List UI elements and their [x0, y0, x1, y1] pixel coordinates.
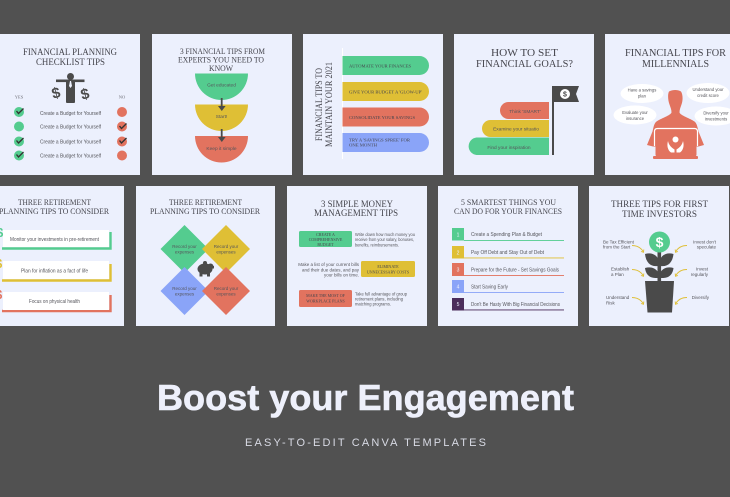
- row 1: [452, 228, 564, 241]
- panel: financial tips to maintain: [303, 34, 443, 175]
- bubble: evaluate insurance: insurance: [626, 116, 645, 121]
- bar: budget glow up: GIVE YOUR BUDGET A 'GLOW-UP': [349, 90, 422, 94]
- panel: 5 smartest things: [438, 186, 578, 326]
- labels right: speculate: [697, 244, 716, 250]
- title: how to set financial goals: FINANCIAL GOALS?: [476, 59, 573, 70]
- labels left: Establish: [611, 266, 630, 272]
- icon: piggy bank: [198, 261, 214, 276]
- panel: financial tips for millennials: [605, 34, 730, 175]
- bar: consolidate: CONSOLIDATE YOUR SAVINGS: [349, 115, 415, 120]
- step: find your inspiration: Find your inspiration: [487, 145, 531, 151]
- title: rotated: [314, 62, 334, 147]
- tip: focus on physical health: Focus on physical health: [29, 299, 80, 305]
- title: rotated: FINANCIAL TIPS TO: [314, 68, 324, 141]
- tip: plan for inflation: Plan for inflation as a fact of life: [21, 268, 88, 274]
- title: 5 smartest things: 5 SMARTEST THINGS YOU: [461, 198, 556, 207]
- half circle: keep it simple: [195, 136, 248, 162]
- icon: person with laptop: [647, 90, 704, 159]
- yes circles: [14, 107, 24, 160]
- icon: flag with dollar: $: [563, 92, 567, 98]
- icon: dollar plant in pot: $: [656, 234, 664, 250]
- text: write down: benefits, reimbursements.: [355, 242, 399, 248]
- row 2: 2: [457, 250, 460, 256]
- diamond: yellow: [202, 225, 250, 273]
- checklist text: [40, 111, 102, 160]
- panel: financial planning checklist: [0, 34, 140, 175]
- labels right: Invest: [696, 266, 709, 272]
- text: make a list: your bills on time.: [324, 272, 359, 278]
- title: how to set financial goals: HOW TO SET: [491, 48, 559, 59]
- checklist text: Create a Budget for Yourself: [40, 111, 102, 117]
- title: three retirement: PLANNING TIPS TO CONSIDER: [0, 207, 110, 216]
- text: take full advantage: [355, 292, 407, 306]
- labels left: Risk: [606, 300, 615, 306]
- bar: savings spree: ONE MONTH: [349, 142, 378, 148]
- tip box: comprehensive budget: CREATE A: [316, 232, 335, 237]
- bubble: evaluate insurance: Evaluate your: [622, 110, 648, 115]
- step: think smart: [500, 102, 549, 119]
- labels left: from the Start: [603, 244, 631, 250]
- row 4: Start Saving Early: [471, 284, 508, 290]
- step: find your inspiration: [469, 138, 549, 155]
- title: financial planning checklist tips: [23, 47, 117, 67]
- text: take full advantage: matching programs.: [355, 302, 391, 306]
- step: think smart: Think 'SMART': [509, 109, 541, 115]
- bubble: have a savings plan: Have a savings: [628, 88, 656, 92]
- labels: yes and no: NO: [119, 94, 126, 100]
- labels left: Be Tax Efficient: [603, 240, 635, 244]
- half circle: get educated: Get educated: [207, 82, 236, 88]
- bubble: have a savings plan: [620, 84, 664, 103]
- row 1: Create a Spending Plan & Budget: [471, 232, 543, 238]
- text: take full advantage: retirement plans, including: [355, 296, 403, 302]
- title: how to set financial goals: [476, 48, 573, 70]
- panel: 3 simple money management tips: [287, 186, 427, 326]
- title: three retirement: THREE RETIREMENT: [18, 198, 91, 207]
- labels left: [603, 240, 635, 306]
- title: three tips first time investors: THREE TIPS FOR FIRST: [611, 200, 708, 210]
- labels right: Invest don't: [693, 240, 717, 244]
- half circle: keep it simple: Keep it simple: [206, 146, 237, 152]
- text: make a list: Make a list of your current bills: [298, 262, 360, 267]
- bubble: diversify investments: [694, 106, 730, 126]
- tip box: workplace plans: MAKE THE MOST OF: [306, 293, 346, 298]
- row 5: Don't Be Hasty With Big Financial Decisions: [471, 302, 560, 308]
- labels left: a Plan: [611, 272, 624, 277]
- title: three tips first time investors: TIME INVESTORS: [622, 210, 697, 220]
- row 5: [452, 298, 564, 310]
- subheading: easy-to-edit canva templates: EASY-TO-EDIT CANVA TEMPLATES: [245, 437, 486, 449]
- title: three retirement: [0, 198, 110, 216]
- no circles: [117, 107, 127, 160]
- tip: monitor investments: [0, 225, 110, 248]
- title: financial tips for millennials: FINANCIAL TIPS FOR: [625, 48, 726, 59]
- row 4: 4: [457, 284, 460, 290]
- icon: person balancing dollars: [50, 73, 92, 104]
- bar: savings spree: [342, 133, 429, 152]
- icon: person balancing dollars: $: [50, 84, 63, 103]
- checklist text: Create a Budget for Yourself: [40, 154, 102, 160]
- diamond: yellow: Record your: [214, 244, 239, 249]
- tip box: workplace plans: [299, 290, 352, 307]
- bar: budget glow up: [342, 82, 429, 101]
- checklist text: Create a Budget for Yourself: [40, 124, 102, 130]
- checklist text: Create a Budget for Yourself: [40, 140, 102, 146]
- half circle: start: [195, 104, 248, 131]
- bar: savings spree: TRY A 'SAVINGS SPREE' FOR: [349, 138, 411, 142]
- diamond: red: Record your: [214, 286, 239, 291]
- arrows: [218, 98, 226, 142]
- labels: yes and no: YES: [15, 94, 24, 100]
- bar: consolidate: [342, 108, 429, 126]
- diamond: yellow: expenses: [216, 250, 236, 254]
- row 2: Pay Off Debt and Stay Out of Debt: [471, 250, 545, 256]
- title: 3 financial tips: EXPERTS YOU NEED TO: [178, 56, 264, 64]
- bar: automate: [342, 56, 429, 75]
- row 5: 5: [457, 302, 460, 308]
- title: three tips first time investors: [611, 200, 708, 220]
- icon: flag with dollar: [552, 86, 579, 155]
- title: 3 simple money: [314, 199, 398, 218]
- text: make a list: and their due dates, and pay: [302, 268, 360, 272]
- title: 3 simple money: MANAGEMENT TIPS: [314, 208, 398, 218]
- diamond: blue: [160, 267, 208, 315]
- row 3: [452, 263, 564, 276]
- title: financial planning checklist tips: FINANCIAL PLANNING: [23, 47, 117, 57]
- diamond: blue: Record your: [172, 286, 197, 291]
- check marks: [16, 108, 126, 157]
- title: rotated: MAINTAIN YOUR 2021: [324, 62, 334, 147]
- labels right: Diversify: [692, 295, 710, 300]
- tip box: eliminate costs: ELIMINATE: [377, 264, 399, 269]
- text: make a list: [298, 262, 360, 278]
- bubble: diversify investments: investments: [705, 116, 727, 122]
- half circle: get educated: [195, 74, 248, 100]
- panel: three tips for first time investors: [589, 186, 729, 326]
- labels left: Understand: [606, 295, 630, 300]
- title: 5 smartest things: [454, 198, 562, 216]
- tip box: eliminate costs: UNNECESSARY COSTS: [367, 270, 409, 274]
- bar: automate: AUTOMATE YOUR FINANCES: [349, 64, 411, 68]
- title: financial tips for millennials: [625, 48, 726, 70]
- bubble: evaluate insurance: [614, 106, 656, 124]
- icon: person balancing dollars: $: [79, 85, 92, 104]
- bubble: understand credit score: Understand your: [693, 87, 724, 92]
- tip box: comprehensive budget: [299, 231, 352, 247]
- text: write down: [355, 232, 415, 248]
- bubble: have a savings plan: plan: [638, 94, 647, 98]
- title: 3 financial tips: 3 FINANCIAL TIPS FROM: [180, 47, 265, 56]
- row 3: Prepare for the Future - Set Savings Goals: [471, 268, 559, 274]
- diamond: blue: expenses: [175, 292, 195, 296]
- half circle: start: Start!: [216, 114, 227, 120]
- panel: 3 financial tips from experts: [152, 34, 292, 175]
- bubble: understand credit score: [686, 83, 730, 103]
- row 2: [452, 246, 564, 258]
- text: write down: Write down how much money you: [355, 232, 415, 237]
- row 1: 1: [457, 232, 460, 238]
- panel: three retirement tips (bars): [0, 186, 124, 326]
- title: three retirement diamonds: [150, 198, 261, 216]
- bubble: diversify investments: Diversify your: [703, 110, 729, 116]
- diamond: red: [202, 267, 250, 315]
- diamond: red: expenses: [216, 292, 236, 296]
- diamond: green: expenses: [175, 250, 195, 254]
- text: take full advantage: Take full advantage of group: [355, 292, 407, 296]
- step: examine your situation: [482, 120, 549, 137]
- diamond: green: Record your: [172, 244, 197, 249]
- tip: plan for inflation: [0, 256, 110, 280]
- tip: monitor investments: Monitor your investments in pre-retirement: [10, 237, 100, 243]
- step: examine your situation: Examine your situatio: [493, 126, 539, 132]
- title: three retirement diamonds: PLANNING TIPS TO CONSIDER: [150, 207, 261, 216]
- title: financial planning checklist tips: CHECKLIST TIPS: [36, 57, 105, 67]
- labels: yes and no: [15, 94, 126, 100]
- diamond: green: [160, 225, 208, 273]
- tip box: comprehensive budget: COMPREHENSIVE: [309, 237, 343, 242]
- row 4: [452, 280, 564, 293]
- text: write down: receive from your salary, bonuses,: [355, 237, 414, 242]
- bubble: understand credit score: credit score: [697, 93, 719, 98]
- heading: boost your engagement: Boost your Engagement: [157, 377, 574, 418]
- labels right: [691, 240, 717, 300]
- tip box: eliminate costs: [361, 261, 415, 277]
- tip box: comprehensive budget: BUDGET: [317, 242, 334, 247]
- panel: how to set financial goals: [454, 34, 594, 175]
- tip box: workplace plans: WORKPLACE PLANS: [306, 298, 345, 304]
- title: 5 smartest things: CAN DO FOR YOUR FINANCES: [454, 207, 562, 216]
- title: 3 financial tips: KNOW: [209, 64, 233, 73]
- title: three retirement diamonds: THREE RETIREMENT: [169, 198, 242, 207]
- tip: focus on physical health: [0, 287, 110, 311]
- title: 3 financial tips: [178, 47, 265, 73]
- labels right: regularly: [691, 272, 709, 277]
- panel: three retirement tips (diamonds): [136, 186, 275, 326]
- row 3: 3: [457, 268, 460, 274]
- title: 3 simple money: 3 SIMPLE MONEY: [321, 199, 393, 209]
- title: financial tips for millennials: MILLENNIALS: [642, 59, 709, 70]
- arrows: curved yellow: [632, 246, 687, 304]
